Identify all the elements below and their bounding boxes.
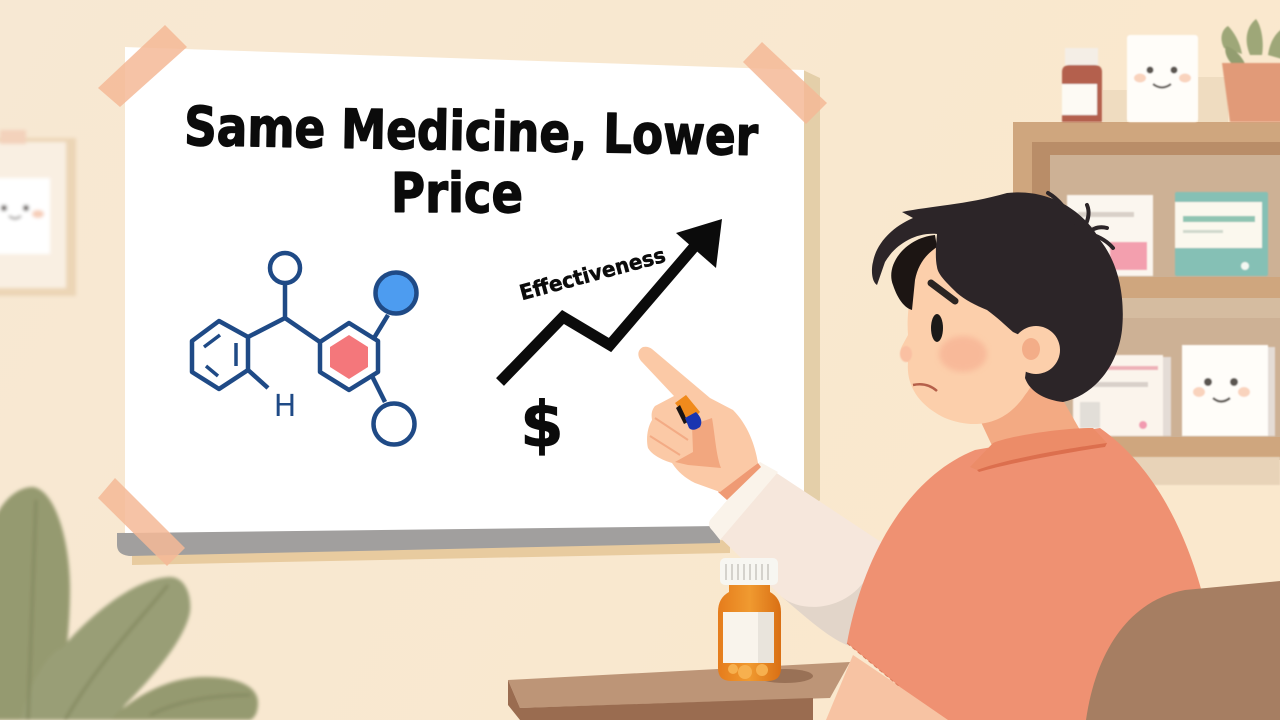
sleeve arm (709, 462, 890, 646)
title: Price (391, 162, 523, 225)
box lower left (1073, 355, 1171, 436)
eye (931, 314, 943, 342)
left wall note (0, 130, 76, 296)
forearm skin (826, 655, 950, 720)
shelf unit (1013, 19, 1280, 485)
hair strands (1048, 193, 1113, 248)
eyebrow (931, 283, 955, 301)
collar (970, 428, 1107, 470)
wrist band (718, 463, 761, 500)
ear (1012, 326, 1060, 374)
effectiveness label: Effectiveness (517, 243, 668, 305)
hand pointing (638, 347, 761, 500)
title: Same Medicine, Lower (184, 95, 759, 168)
background plant (0, 487, 258, 720)
poster shadow (803, 70, 820, 520)
finger lines (650, 418, 688, 455)
poster (125, 47, 804, 533)
person torso (847, 428, 1204, 720)
capsule (675, 395, 700, 422)
dollar sign: $ (520, 388, 564, 461)
box teal (1175, 192, 1268, 276)
head (872, 192, 1123, 472)
face (900, 240, 1041, 424)
desk (508, 662, 850, 720)
under-fringe (891, 235, 937, 310)
nose tip (900, 346, 912, 362)
blush (939, 336, 987, 372)
molecule diagram (192, 253, 416, 444)
molecule H label: H (274, 389, 296, 424)
tape pieces (98, 25, 827, 566)
box pink (1067, 195, 1153, 276)
title (184, 95, 759, 225)
tan boxes behind (1103, 90, 1127, 122)
neck (980, 378, 1080, 452)
shelf backing (1050, 155, 1280, 460)
shelf bottle (1062, 48, 1102, 122)
tray (117, 523, 720, 556)
hair (872, 192, 1123, 402)
effectiveness arrow (500, 219, 722, 382)
shelf smiley box top (1127, 35, 1198, 122)
smiley box lower (1182, 345, 1275, 436)
potted plant (1221, 19, 1280, 122)
mouth (913, 384, 937, 391)
chair (1086, 581, 1280, 720)
palm shadow (675, 418, 721, 468)
medicine bottle (718, 558, 781, 681)
